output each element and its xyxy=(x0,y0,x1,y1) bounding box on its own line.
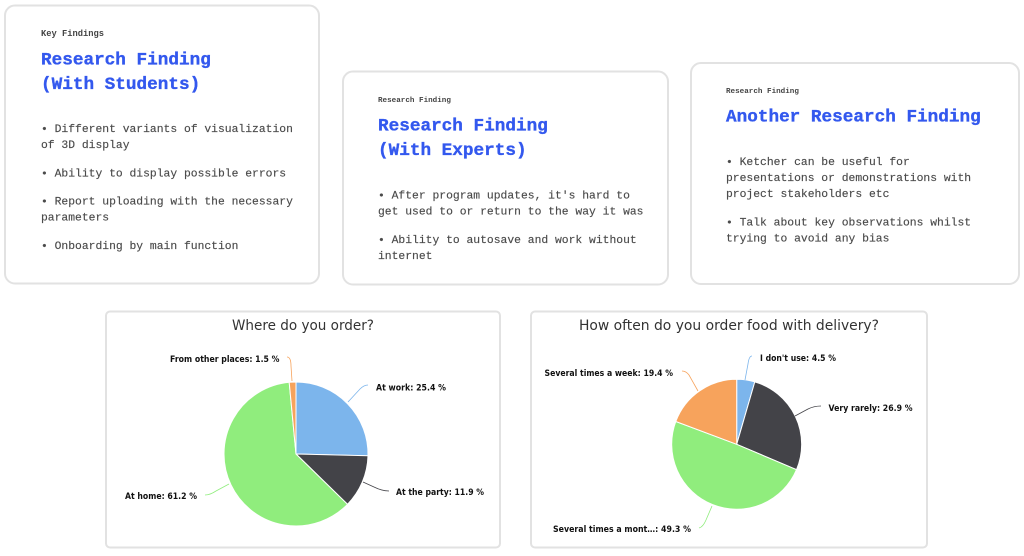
pie: several times a month 49.3% xyxy=(672,422,796,509)
connector: I don't use xyxy=(745,356,752,380)
heading: Another Research Finding xyxy=(726,108,981,128)
eyebrow label: Research Finding xyxy=(378,97,451,105)
pie: from other places 1.5% xyxy=(289,382,296,454)
panel: another research finding xyxy=(691,63,1019,284)
eyebrow label: Key Findings xyxy=(41,29,104,39)
label: several times a week: Several times a week: 19.4 % xyxy=(544,369,673,379)
label: very rarely: Very rarely: 26.9 % xyxy=(828,404,913,414)
pie: I don't use 4.5% xyxy=(737,379,755,444)
bullet list: • Ketcher can be useful for xyxy=(726,157,910,169)
bullet list: internet xyxy=(378,251,432,263)
bullet list: • Report uploading with the necessary xyxy=(41,196,293,208)
bullet list: • Ability to display possible errors xyxy=(41,168,286,180)
connector: at home xyxy=(205,484,229,495)
heading: Research Finding xyxy=(378,116,548,136)
eyebrow label: Research Finding xyxy=(726,88,799,96)
heading: Research Finding xyxy=(41,50,211,70)
panel: pie chart where do you order xyxy=(106,312,500,548)
pie: at work 25.4% xyxy=(296,382,368,456)
bullet list: • Onboarding by main function xyxy=(41,241,238,253)
label: at the party: At the party: 11.9 % xyxy=(396,488,484,498)
bullet list: parameters xyxy=(41,212,109,224)
heading: (With Experts) xyxy=(378,141,527,161)
panel: pie chart how often do you order xyxy=(531,312,927,548)
pie: very rarely 26.9% xyxy=(737,382,802,470)
bullet list: • Talk about key observations whilst xyxy=(726,218,971,230)
bullet list: • Different variants of visualization xyxy=(41,124,293,136)
bullet list: • Ability to autosave and work without xyxy=(378,235,637,247)
bullet list: of 3D display xyxy=(41,140,130,152)
bullet list: • After program updates, it's hard to xyxy=(378,190,630,202)
label: at home: At home: 61.2 % xyxy=(125,492,197,502)
label: several times a month: Several times a mont…: 49.3 % xyxy=(553,525,691,535)
chart title: Where do you order? xyxy=(232,318,374,334)
pie: at home 61.2% xyxy=(224,382,348,526)
panel: research finding with experts xyxy=(343,72,668,284)
label: from other places: From other places: 1.5 % xyxy=(170,355,280,365)
connector: several times a week xyxy=(682,371,698,391)
bullet list: presentations or demonstrations with xyxy=(726,173,971,185)
label: I don't use: I don't use: 4.5 % xyxy=(760,354,836,364)
chart title: How often do you order food with delivery? xyxy=(579,318,879,334)
bullet list: project stakeholders etc xyxy=(726,189,889,201)
label: at work: At work: 25.4 % xyxy=(376,384,446,394)
bullet list: trying to avoid any bias xyxy=(726,234,889,246)
connector: at the party xyxy=(363,482,389,491)
heading: (With Students) xyxy=(41,75,200,95)
connector: at work xyxy=(348,385,368,402)
connector: several times a month xyxy=(699,506,712,528)
connector: very rarely xyxy=(795,406,821,416)
connector: from other places xyxy=(287,357,292,381)
pie: several times a week 19.4% xyxy=(676,379,737,444)
pie: at the party 11.9% xyxy=(296,454,368,504)
bullet list: get used to or return to the way it was xyxy=(378,206,644,218)
panel: key findings with students xyxy=(5,6,319,284)
